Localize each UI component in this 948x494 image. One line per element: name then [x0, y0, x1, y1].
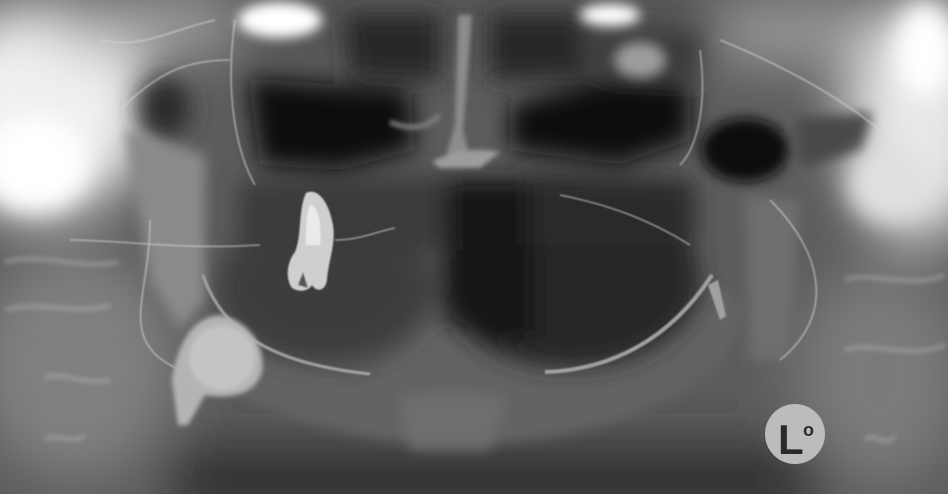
side marker L: o — [803, 420, 814, 440]
dark airway patch right — [701, 112, 872, 182]
side marker L: L — [778, 416, 804, 463]
bright top patches — [238, 2, 666, 78]
radiopaque lesion at mandibular angle — [172, 315, 263, 425]
mandible body — [185, 285, 745, 450]
ramus columns — [125, 130, 800, 360]
neck vertebrae bands — [5, 259, 945, 441]
bright spot on right mandible — [708, 280, 726, 320]
upper dark sinus and nasal region — [137, 15, 700, 170]
fine skull lines — [70, 20, 880, 370]
remaining tooth — [288, 192, 334, 291]
side marker L — [765, 404, 825, 464]
dark mouth cavity — [217, 172, 700, 368]
bright temporal patches — [0, 2, 948, 223]
midline nasal septum — [390, 15, 500, 168]
mandible upper cortical border — [203, 275, 712, 374]
